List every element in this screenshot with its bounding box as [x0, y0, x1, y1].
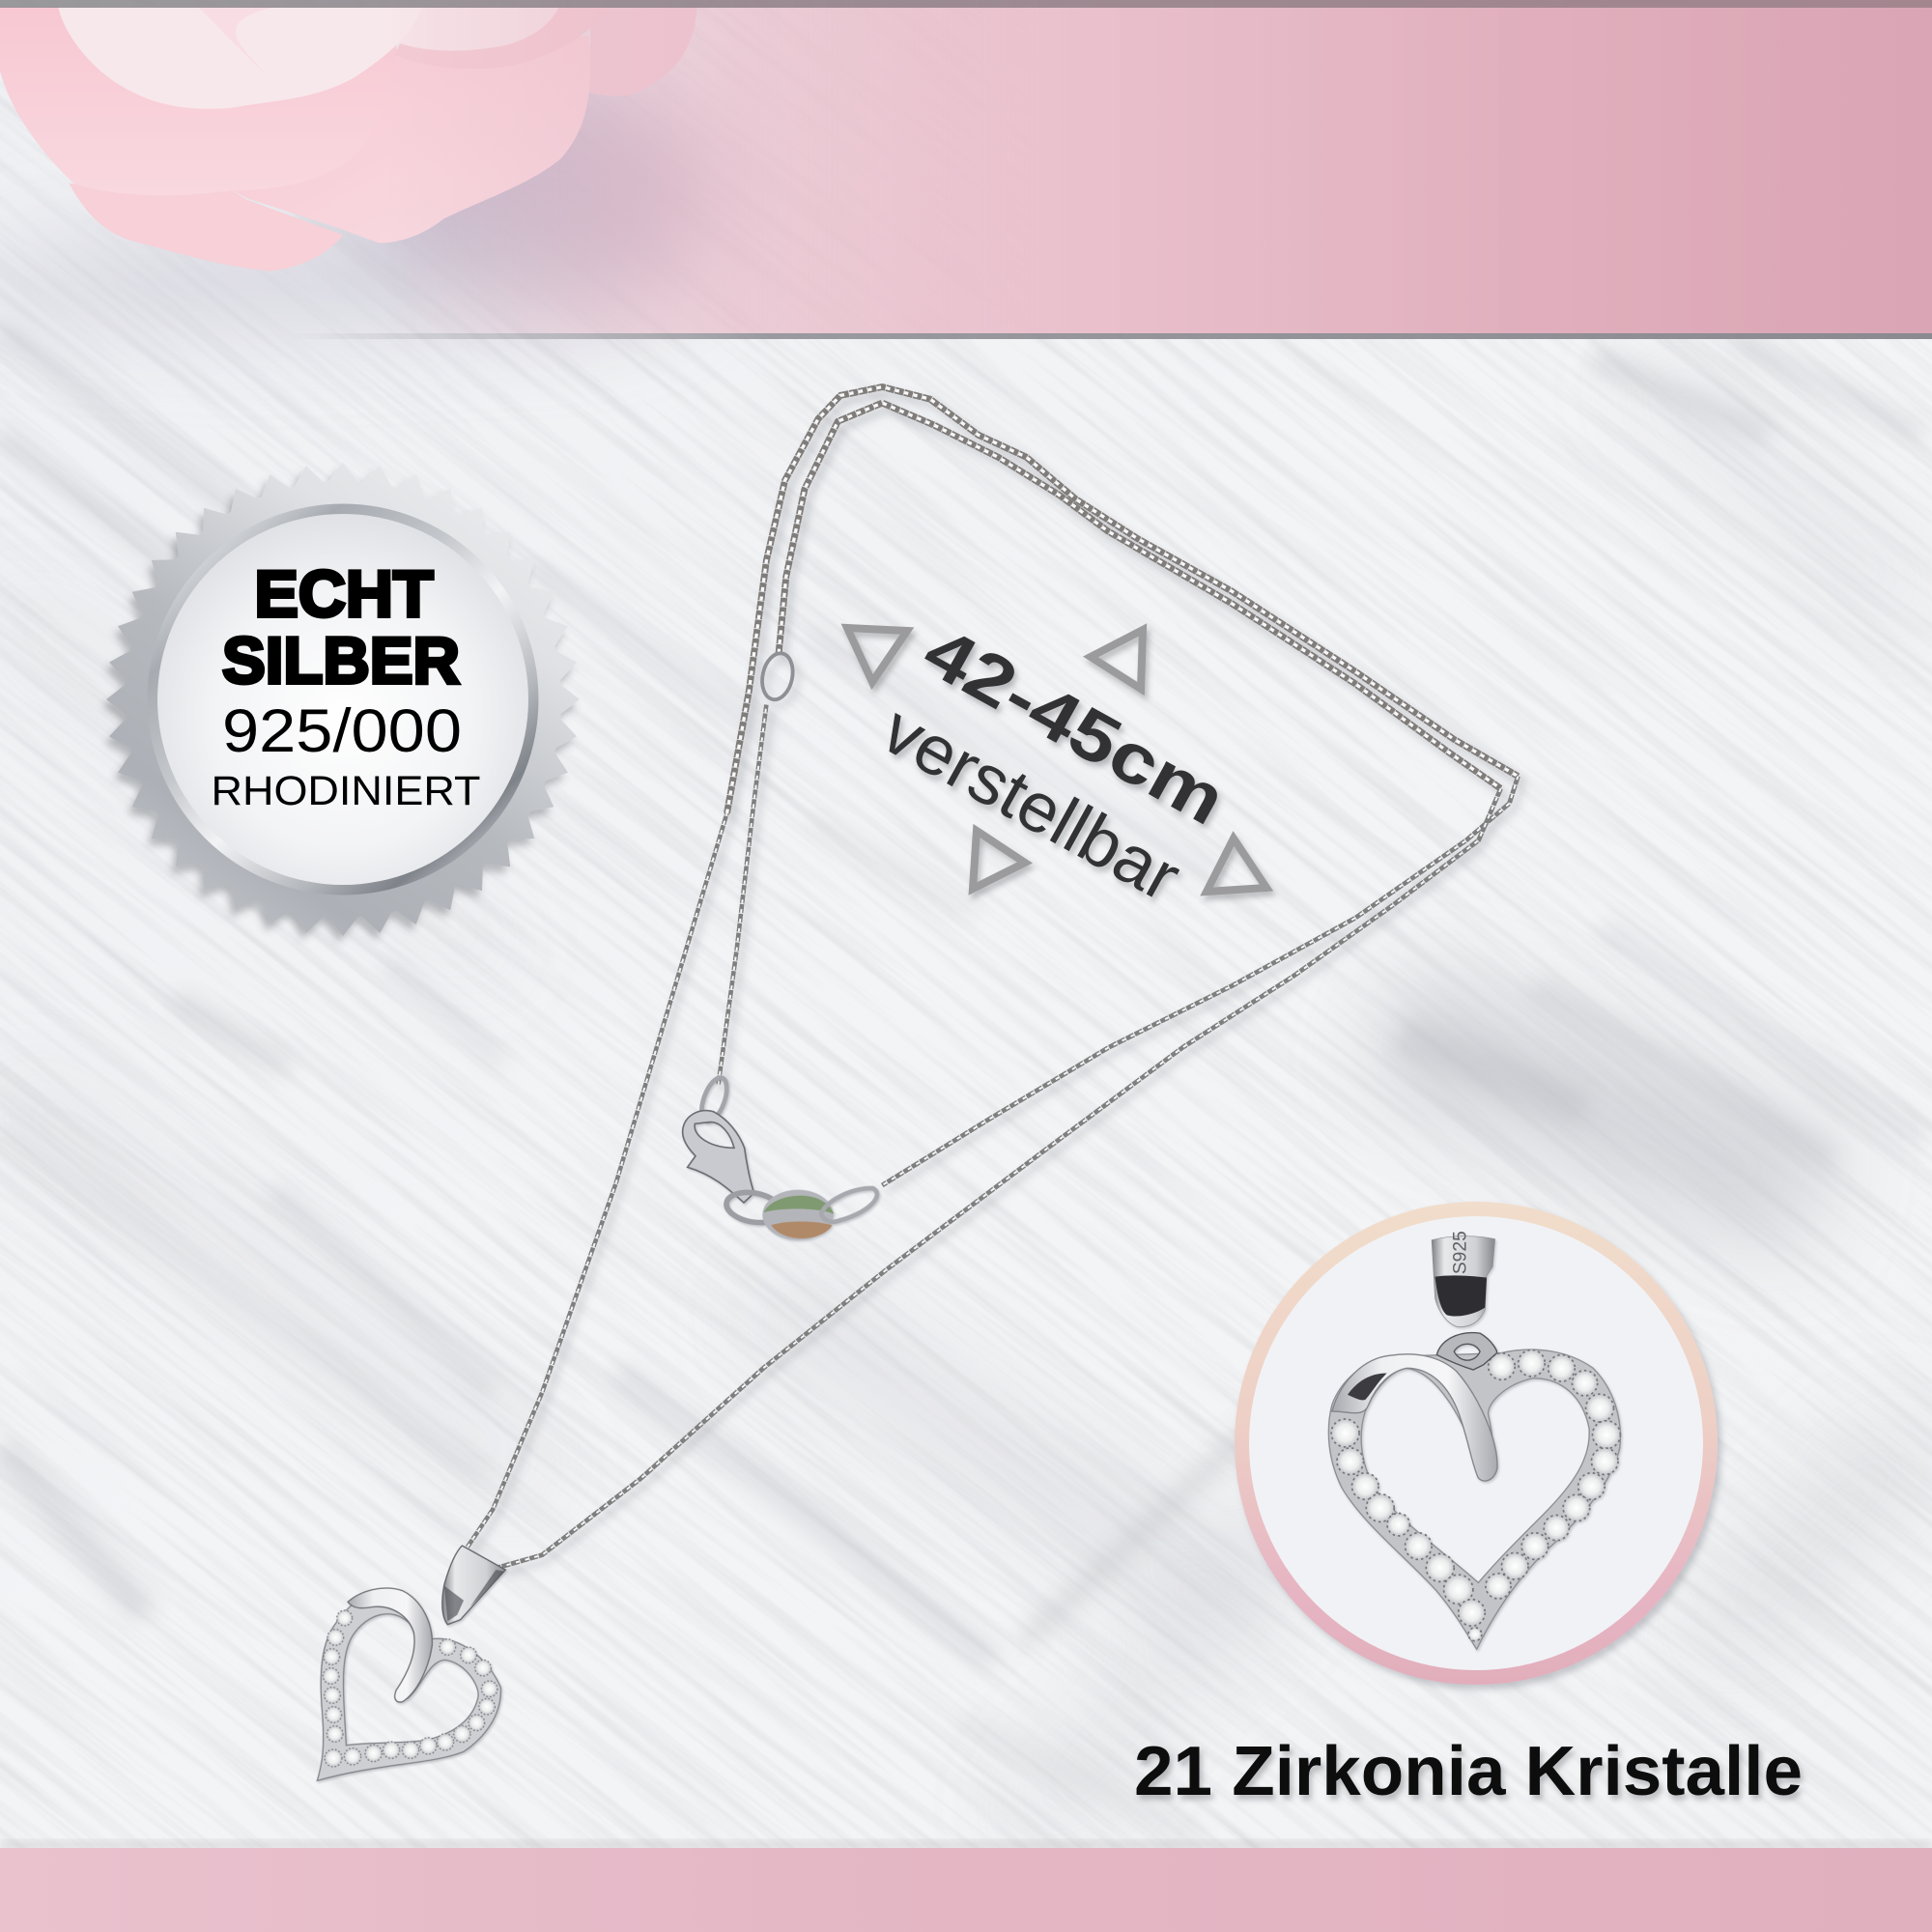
flower photo — [0, 7, 697, 271]
triangle markers — [847, 628, 1266, 892]
clasp: end tag — [762, 1190, 834, 1240]
necklace chain — [462, 387, 1518, 1567]
chain: return strand to pendant — [499, 788, 1501, 1567]
large pendant: bail — [1432, 1236, 1495, 1327]
small pendant: heart frame — [317, 1590, 500, 1780]
bottom pink band — [0, 1840, 1932, 1932]
seal: serrated edge — [101, 458, 584, 941]
small heart pendant — [317, 1546, 505, 1780]
length label — [869, 611, 1238, 917]
clasp: long link — [821, 1188, 877, 1222]
large pendant: bail shadow — [1435, 1275, 1487, 1317]
large pendant: dark reflection — [1348, 1373, 1387, 1400]
small pendant: bail — [442, 1546, 505, 1625]
length value: 42-45cm — [911, 611, 1238, 840]
triangle: upper right — [1091, 630, 1143, 689]
large pendant: stones — [1331, 1350, 1620, 1641]
clasp: upper ring — [696, 1074, 732, 1125]
large pendant: swoosh — [1332, 1354, 1497, 1481]
crystals caption: 21 Zirkonia Kristalle — [1134, 1733, 1803, 1810]
seal: ECHT: ECHT — [255, 557, 433, 631]
small pendant: stones — [323, 1610, 497, 1767]
triangle: lower right — [1207, 838, 1266, 892]
banner bottom shadow — [0, 333, 1932, 339]
top grey strip — [0, 0, 1932, 8]
chain: return strand to clasp — [882, 777, 1518, 1185]
clasp: connecting ring — [724, 1188, 782, 1227]
seal: 925/000: 925/000 — [222, 697, 462, 765]
petal: top white — [58, 7, 423, 109]
lilac shadow area behind flower — [0, 68, 724, 328]
triangle: upper left — [847, 628, 907, 682]
extender end ring — [758, 650, 797, 702]
inset: gradient ring — [1235, 1202, 1718, 1685]
chain: upper double strand, outer — [727, 387, 1518, 813]
triangle: lower left — [973, 831, 1025, 889]
zoom inset circle — [1235, 1202, 1718, 1685]
large pendant: jump ring — [1436, 1333, 1497, 1370]
petal: lower right — [232, 36, 590, 243]
seal: metal ring — [153, 509, 533, 890]
petal: centre — [0, 7, 397, 195]
chain: extender lower part — [719, 705, 766, 1084]
inset: white background — [1249, 1216, 1703, 1670]
silver quality seal — [101, 458, 584, 941]
chain: lower left strand — [462, 813, 727, 1555]
seal: white face — [157, 514, 528, 885]
large pendant: heart frame — [1328, 1350, 1620, 1649]
clasp — [683, 1074, 877, 1240]
inset: large pendant — [1328, 1231, 1620, 1649]
petal: right back — [588, 7, 697, 96]
large pendant: hallmark: S925 — [1451, 1231, 1471, 1274]
seal: SILBER: SILBER — [222, 624, 460, 697]
chain: upper double strand, inner — [779, 403, 1501, 788]
petal: bottom left — [69, 184, 343, 271]
seal: RHODINIERT: RHODINIERT — [211, 768, 481, 814]
clasp: lobster claw — [683, 1111, 754, 1203]
adjustable label: verstellbar — [869, 691, 1193, 917]
petal: upper right — [394, 7, 611, 69]
small pendant: swoosh — [348, 1588, 432, 1702]
top pink banner — [0, 0, 1932, 333]
small pendant: bail reflection — [444, 1570, 504, 1621]
